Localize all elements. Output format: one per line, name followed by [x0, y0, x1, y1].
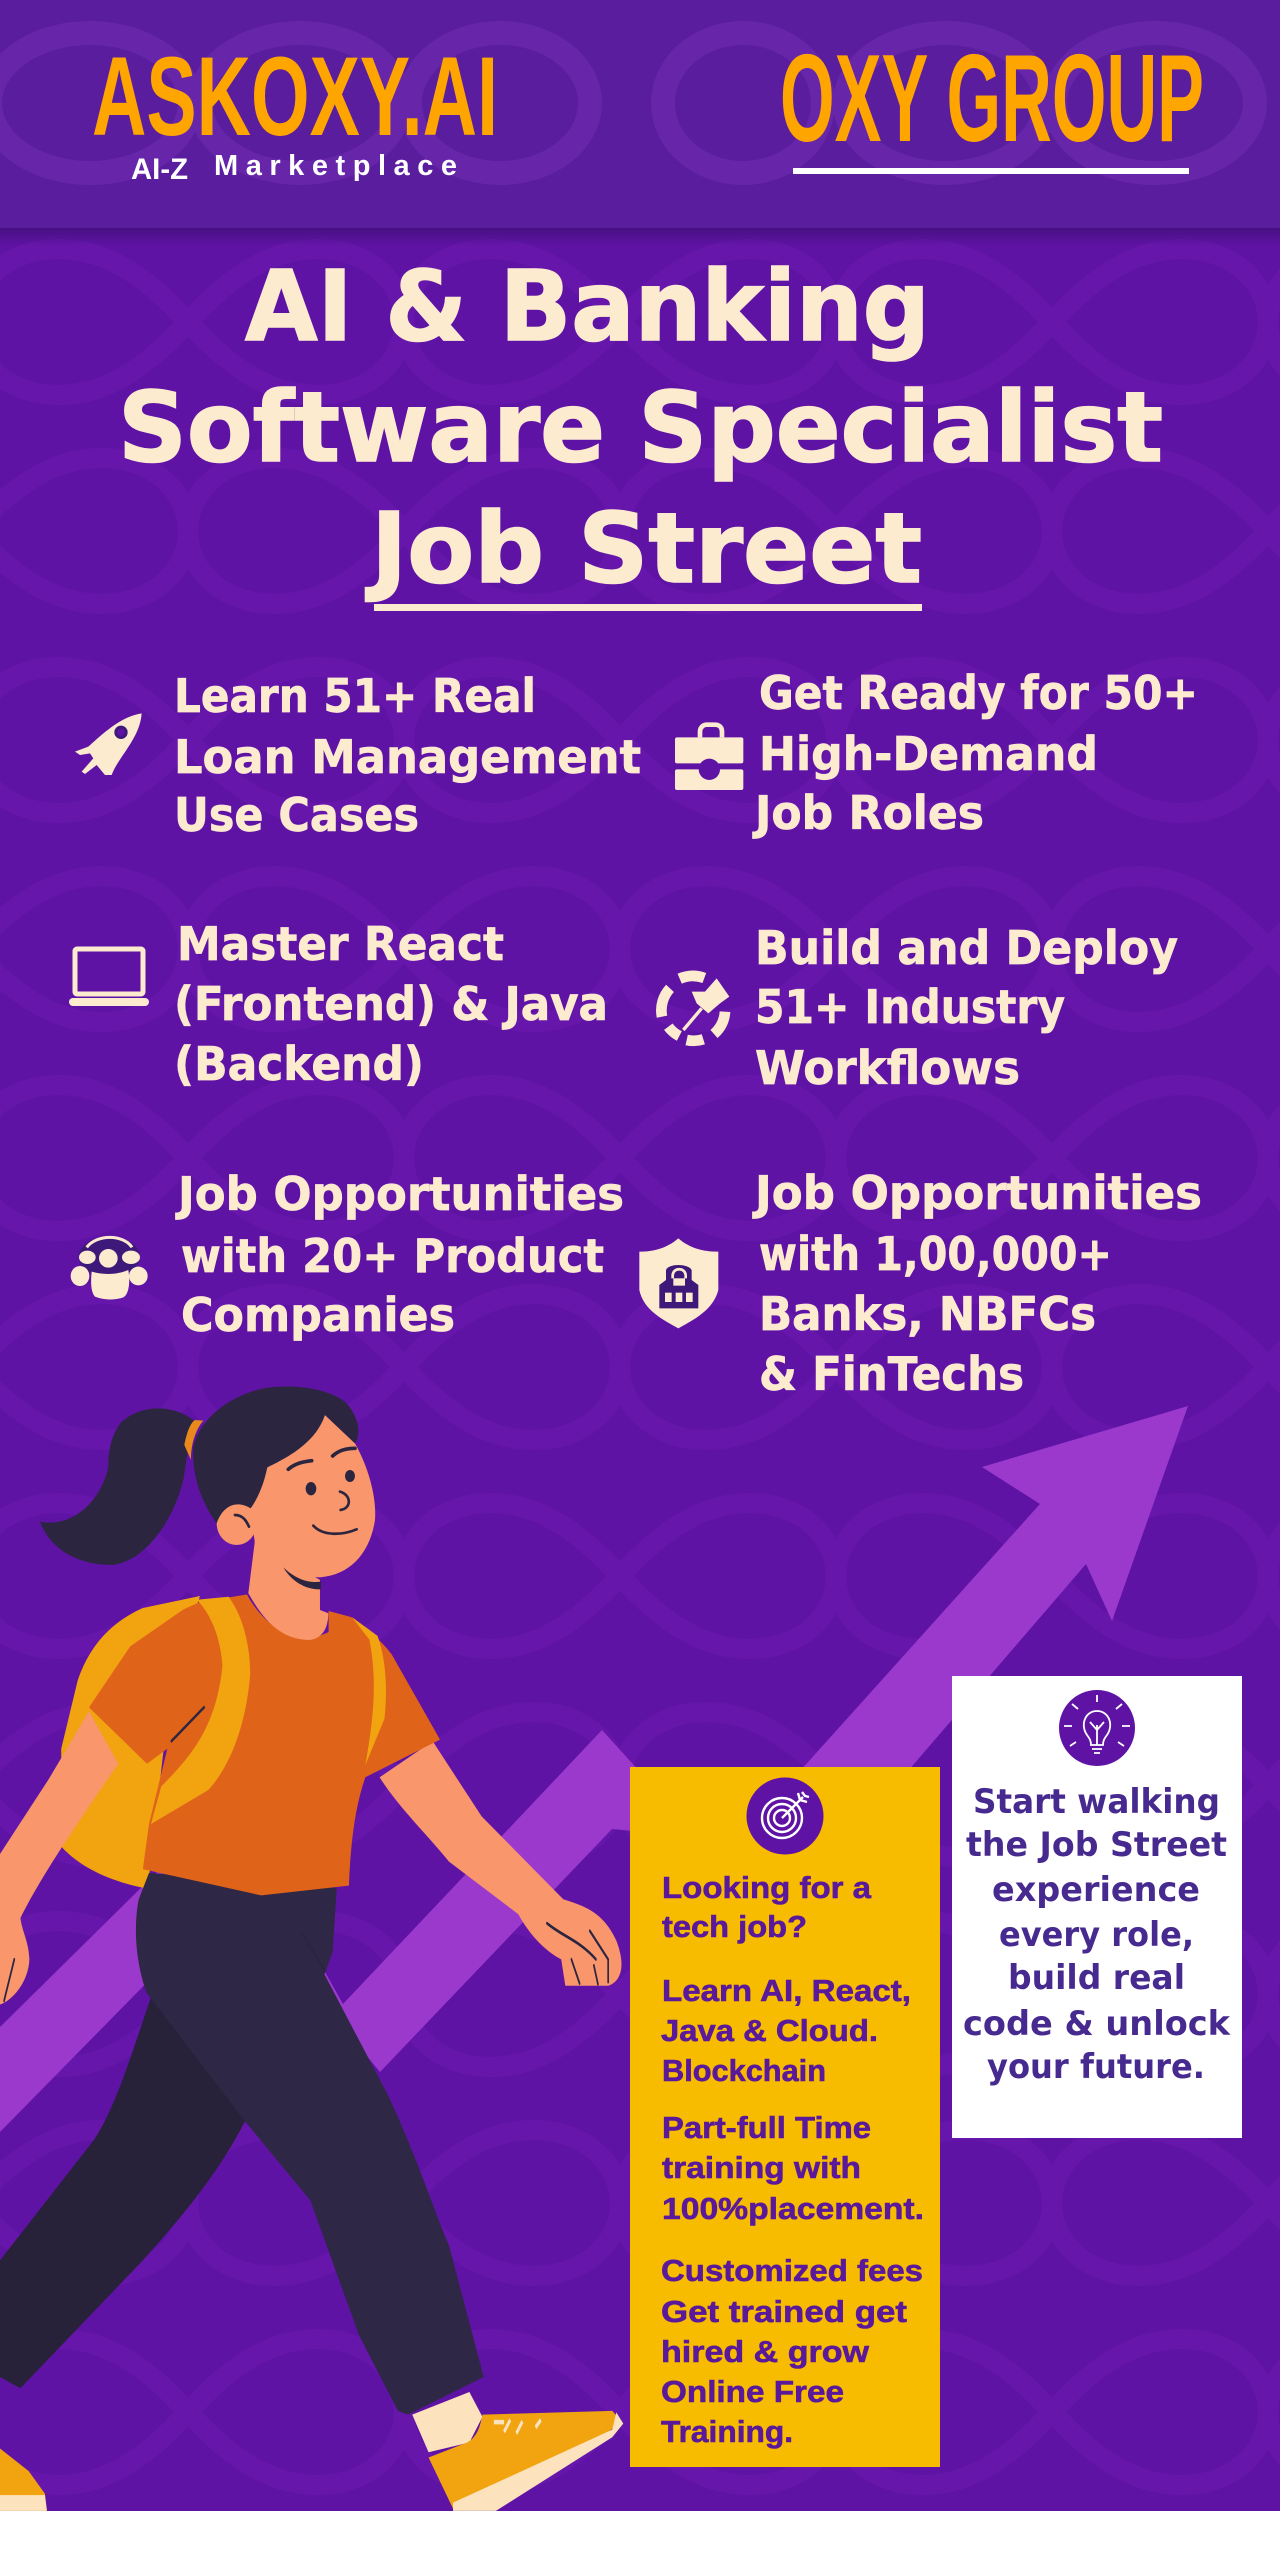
text: job roles	[752, 666, 1198, 840]
ponytail	[40, 1408, 193, 1565]
text: training details: Customized fees	[661, 2253, 923, 2288]
header band	[0, 0, 1280, 228]
text: loan management: Use Cases	[174, 788, 419, 842]
icon: bank shield	[639, 1238, 718, 1328]
text: job roles: Job Roles	[752, 786, 984, 840]
text: start walking: the Job Street	[966, 1825, 1227, 1865]
icon: target badge	[746, 1778, 824, 1854]
feature: product companies	[71, 1167, 624, 1342]
icon: workflow cycle	[661, 976, 729, 1041]
text: training details: 100%placement.	[662, 2191, 924, 2226]
text: start walking: experience	[992, 1870, 1200, 1910]
illustration: walking woman	[0, 1386, 623, 2511]
brand underline	[793, 168, 1189, 174]
tagline: AI-Z Marketplace	[131, 150, 457, 186]
text: training details: hired & grow	[661, 2334, 870, 2369]
icon: laptop	[69, 949, 149, 1006]
text: banks and fintechs	[752, 1166, 1202, 1401]
text: training details: Looking for a	[662, 1870, 872, 1905]
title: Software Specialist	[118, 371, 1163, 484]
hair tie	[184, 1420, 203, 1460]
growth arrow	[0, 1406, 1188, 2132]
text: react and java: (Backend)	[174, 1037, 424, 1091]
left arm	[0, 1711, 118, 2005]
sock	[412, 2392, 482, 2452]
tagline: AI-Z Marketplace: Marketplace	[214, 150, 457, 182]
text: training details: Training.	[661, 2414, 793, 2449]
text: product companies: Job Opportunities	[175, 1167, 624, 1221]
icon: briefcase	[675, 725, 743, 790]
text: industry workflows	[755, 921, 1178, 1095]
feature: industry workflows	[661, 921, 1178, 1095]
chin shadow	[283, 1567, 321, 1589]
feature: banks and fintechs	[639, 1166, 1202, 1401]
tagline: AI-Z Marketplace: AI-Z	[131, 153, 188, 186]
icon: network cluster	[71, 1237, 148, 1300]
icon: rocket	[75, 713, 142, 775]
text: start walking: Start walking	[973, 1782, 1220, 1822]
text: loan management: Loan Management	[174, 730, 641, 784]
icon: lightbulb badge	[1059, 1690, 1135, 1766]
text: react and java: (Frontend) & Java	[174, 977, 608, 1031]
text: training details: Online Free	[661, 2374, 844, 2409]
text: start walking: every role,	[999, 1915, 1194, 1955]
text: banks and fintechs: & FinTechs	[759, 1347, 1024, 1401]
hair	[193, 1386, 358, 1523]
text: training details: Java & Cloud.	[661, 2013, 878, 2048]
text: training details: Get trained get	[661, 2294, 907, 2329]
text: banks and fintechs: with 1,00,000+	[759, 1227, 1112, 1281]
title: AI & Banking	[245, 250, 930, 363]
text: start walking: build real	[1008, 1958, 1185, 1998]
text: job roles: Get Ready for 50+	[759, 666, 1198, 720]
text: training details: tech job?	[662, 1909, 807, 1944]
text: react and java	[174, 917, 608, 1091]
face	[250, 1415, 375, 1577]
facial features	[235, 1448, 357, 1534]
text: industry workflows: Workflows	[755, 1041, 1020, 1095]
text: react and java: Master React	[177, 917, 504, 971]
feature: react and java	[69, 917, 608, 1091]
ear	[217, 1502, 257, 1545]
shirt	[89, 1594, 440, 1895]
text: product companies	[175, 1167, 624, 1342]
text: loan management	[174, 669, 641, 842]
body	[0, 1594, 623, 2511]
feature: job roles	[675, 666, 1198, 840]
text: product companies: Companies	[181, 1288, 455, 1342]
text: start walking	[963, 1782, 1231, 2087]
feature: loan management use cases	[75, 669, 641, 842]
title	[118, 250, 1163, 611]
text: job roles: High-Demand	[759, 727, 1098, 781]
text: loan management: Learn 51+ Real	[174, 669, 536, 723]
text: training details	[661, 1870, 924, 2449]
text: product companies: with 20+ Product	[181, 1229, 604, 1283]
text: banks and fintechs: Job Opportunities	[752, 1166, 1202, 1220]
trousers	[136, 1873, 484, 2415]
front shoe	[429, 2411, 622, 2509]
text: training details: Part-full Time	[662, 2110, 871, 2145]
callout: white job street panel	[952, 1676, 1242, 2138]
text: banks and fintechs: Banks, NBFCs	[759, 1287, 1096, 1341]
title: Job Street	[365, 492, 922, 605]
text: industry workflows: Build and Deploy	[755, 921, 1178, 975]
text: start walking: your future.	[987, 2047, 1205, 2087]
eyes	[306, 1470, 355, 1495]
text: training details: Blockchain	[662, 2053, 826, 2088]
back shoe	[0, 2448, 47, 2511]
neck	[248, 1540, 328, 1640]
text: training details: training with	[662, 2150, 861, 2185]
right arm	[380, 1741, 621, 1986]
head	[40, 1386, 375, 1640]
callout: yellow training panel	[630, 1767, 940, 2467]
backpack straps	[151, 1597, 250, 1824]
backpack	[61, 1596, 200, 1889]
text: start walking: code & unlock	[963, 2004, 1231, 2044]
text: training details: Learn AI, React,	[662, 1973, 911, 2008]
detail lines	[4, 1707, 608, 2001]
brand: ASKOXY.AI: ASKOXY.AI	[92, 34, 498, 159]
back leg	[0, 1997, 245, 2388]
text: industry workflows: 51+ Industry	[755, 980, 1065, 1034]
